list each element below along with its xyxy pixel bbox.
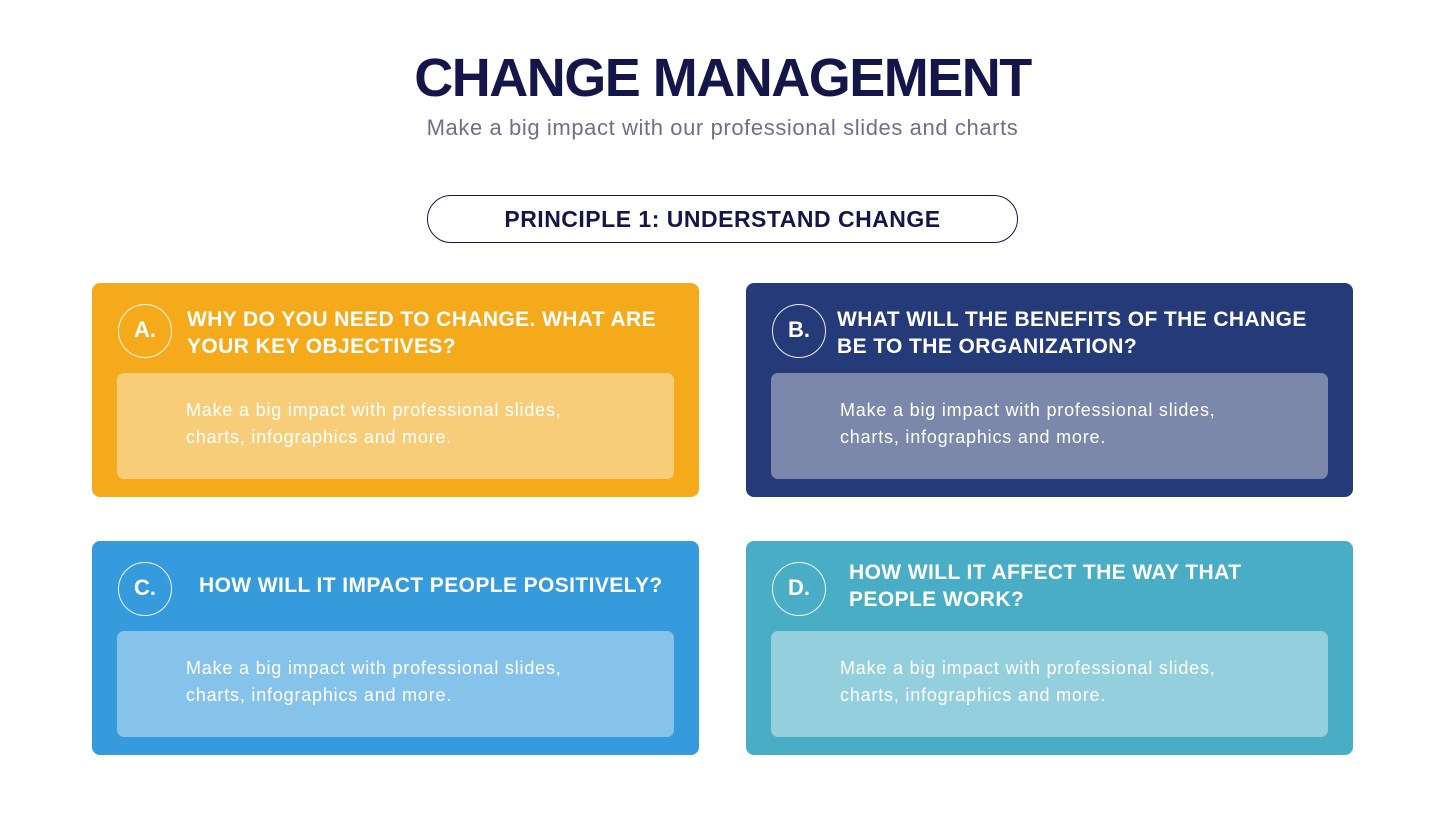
heading D: PEOPLE WORK? (849, 588, 1024, 611)
icon: A circle (118, 304, 172, 358)
heading D (849, 561, 1241, 611)
icon: C circle (118, 562, 172, 616)
heading D: HOW WILL IT AFFECT THE WAY THAT (849, 561, 1241, 584)
text box C: Make a big impact with professional slides, (186, 658, 562, 678)
text box B: charts, infographics and more. (840, 427, 1106, 447)
text box C (117, 631, 674, 737)
principle pill: PRINCIPLE 1: UNDERSTAND CHANGE (504, 206, 941, 232)
panel: D (746, 541, 1353, 755)
icon: B circle: B. (788, 317, 810, 342)
text box A: Make a big impact with professional slides, (186, 400, 562, 420)
icon: A circle: A. (134, 317, 156, 342)
title: CHANGE MANAGEMENT (414, 48, 1031, 108)
text box A (117, 373, 674, 479)
icon: D circle: D. (788, 575, 810, 600)
heading A (187, 308, 656, 358)
text box D: Make a big impact with professional slides, (840, 658, 1216, 678)
heading A: WHY DO YOU NEED TO CHANGE. WHAT ARE (187, 308, 656, 331)
panel: A (92, 283, 699, 497)
panel: B (746, 283, 1353, 497)
heading B: WHAT WILL THE BENEFITS OF THE CHANGE (837, 308, 1307, 331)
panel: C (92, 541, 699, 755)
icon: C circle: C. (134, 575, 156, 600)
heading B: BE TO THE ORGANIZATION? (837, 335, 1137, 358)
text box C: charts, infographics and more. (186, 685, 452, 705)
text box D: charts, infographics and more. (840, 685, 1106, 705)
text box B: Make a big impact with professional slides, (840, 400, 1216, 420)
heading C: HOW WILL IT IMPACT PEOPLE POSITIVELY? (199, 574, 663, 597)
text box B (771, 373, 1328, 479)
text box D (771, 631, 1328, 737)
heading A: YOUR KEY OBJECTIVES? (187, 335, 456, 358)
principle pill (427, 195, 1018, 243)
icon: B circle (772, 304, 826, 358)
icon: D circle (772, 562, 826, 616)
heading B (837, 308, 1307, 358)
subtitle: Make a big impact with our professional slides and charts (427, 115, 1018, 140)
text box A: charts, infographics and more. (186, 427, 452, 447)
